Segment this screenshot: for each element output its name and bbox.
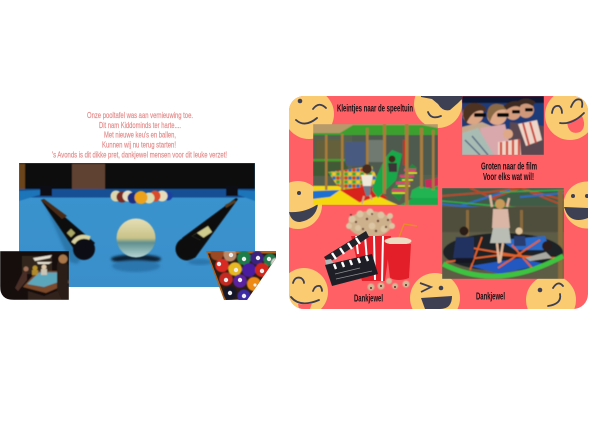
icon: winking emoji bottom right (526, 278, 576, 309)
text: Voor elks wat wil: Voor elks wat wil! (483, 172, 534, 183)
icon: winking emoji top left (289, 96, 334, 139)
icon: sunglasses emoji (414, 96, 462, 128)
icon: laughing emoji left (289, 181, 322, 229)
photo: child on trampoline net (442, 188, 564, 279)
icon: laughing emoji bottom (410, 273, 460, 309)
text block: pool table story: Onze pooltafel was aan vernieuwing toe. (87, 110, 193, 120)
panel: red activities board (289, 96, 588, 309)
photo: rack of billiard balls (206, 251, 276, 300)
illustration: popcorn, clapperboard and drink (324, 208, 417, 290)
text block: pool table story: Dit nam Kiddominds ter harte.... (99, 120, 181, 130)
text: Dankjewel left: Dankjewel (354, 294, 383, 304)
heading: Kleintjes naar de speeltuin: Kleintjes naar de speeltuin (337, 104, 413, 114)
text block: pool table story: 's Avonds is dit dikke pret, dankjewel mensen voor dit leuke verzet! (52, 150, 227, 160)
icon: tongue emoji top right (545, 96, 588, 140)
text block: pool table story: Kunnen wij nu terug starten! (102, 140, 176, 150)
icon: tongue emoji bottom left (289, 268, 328, 309)
photo: children in indoor playground (313, 124, 438, 205)
photo: pool table with cue ball and cues (19, 163, 255, 287)
icon: laughing emoji right (564, 182, 588, 228)
text block: pool table story (52, 110, 227, 160)
photo: people playing pool (0, 251, 69, 300)
photo: children in cinema with 3D glasses (462, 96, 544, 155)
rack of balls on the table (110, 190, 172, 204)
heading: Groten naar de film: Groten naar de film (481, 162, 537, 172)
text block: pool table story: Met nieuwe keu's en ballen, (104, 130, 176, 140)
text: Dankjewel right: Dankjewel (476, 292, 505, 302)
